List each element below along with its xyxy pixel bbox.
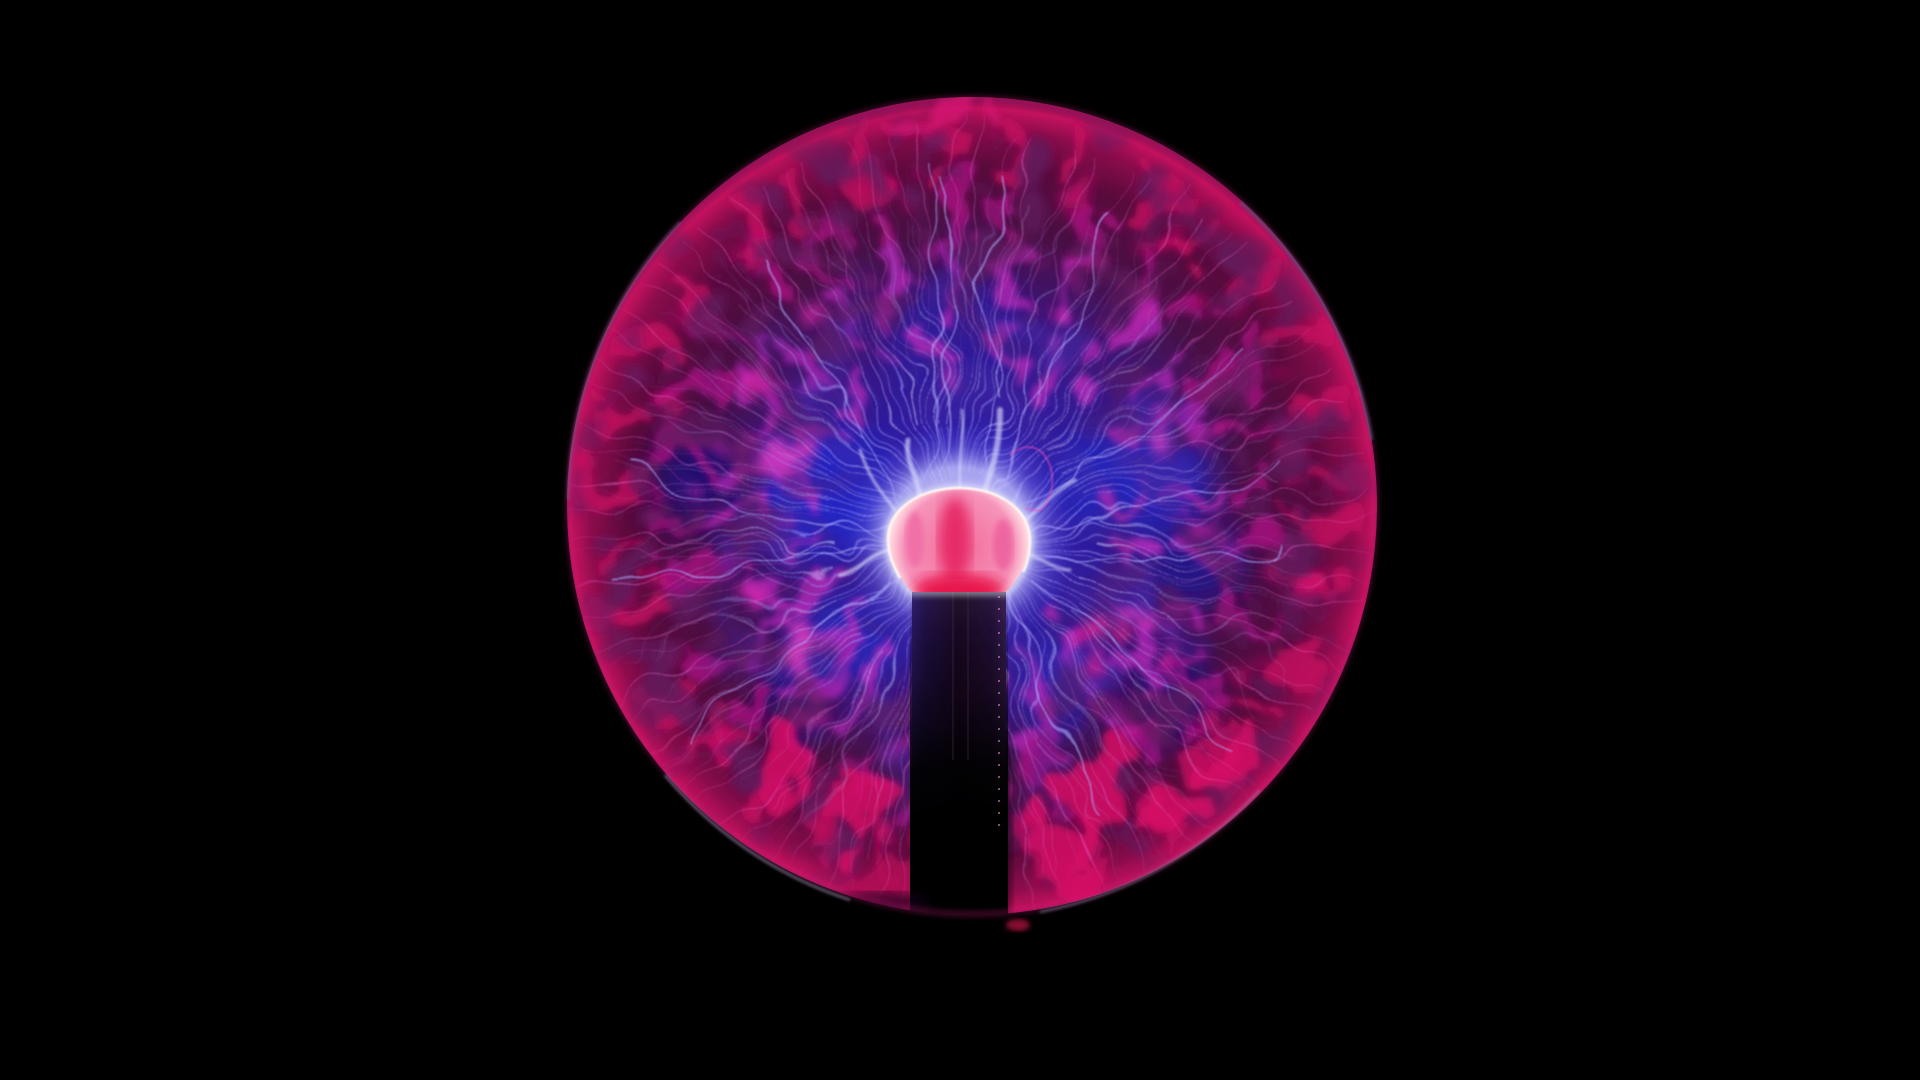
pink loop right of electrode bbox=[1010, 447, 1052, 511]
column body bbox=[912, 590, 1006, 890]
electrode rim highlight bbox=[888, 488, 1030, 578]
glass rim bbox=[568, 98, 1376, 914]
base reflection bbox=[1006, 919, 1030, 931]
column fade to black bbox=[910, 590, 1008, 920]
thin radial filaments, pale blue bbox=[732, 305, 1192, 765]
bright central streamers bbox=[840, 410, 1075, 575]
electrode inner bands bbox=[906, 496, 1013, 606]
glass sphere bbox=[560, 90, 1390, 940]
magenta blooms near the core bbox=[769, 358, 1178, 669]
electrode sphere bbox=[888, 488, 1030, 606]
illustration: plasma globe bbox=[562, 92, 1382, 932]
central support column bbox=[910, 590, 1008, 940]
halo around the electrode bbox=[852, 433, 1066, 636]
blue clouds around the core bbox=[652, 280, 1245, 735]
rim shading at the bottom of the sphere bbox=[830, 893, 930, 917]
bright magenta flares in lower half bbox=[765, 106, 1259, 895]
column highlights bbox=[953, 592, 968, 760]
navy shadow patches bbox=[671, 226, 1242, 823]
thin radial filaments, violet bbox=[682, 255, 1242, 815]
mottled dark patches bbox=[560, 90, 1390, 920]
column shadow edge bbox=[922, 740, 1006, 940]
blue-white filaments bbox=[615, 160, 1290, 810]
electrode glow bbox=[888, 488, 1030, 592]
radial magenta wisps, outer band bbox=[614, 148, 1330, 864]
plasma base colour bbox=[560, 90, 1390, 920]
electrode body bbox=[888, 488, 1030, 592]
bright magenta web bbox=[642, 176, 1302, 836]
